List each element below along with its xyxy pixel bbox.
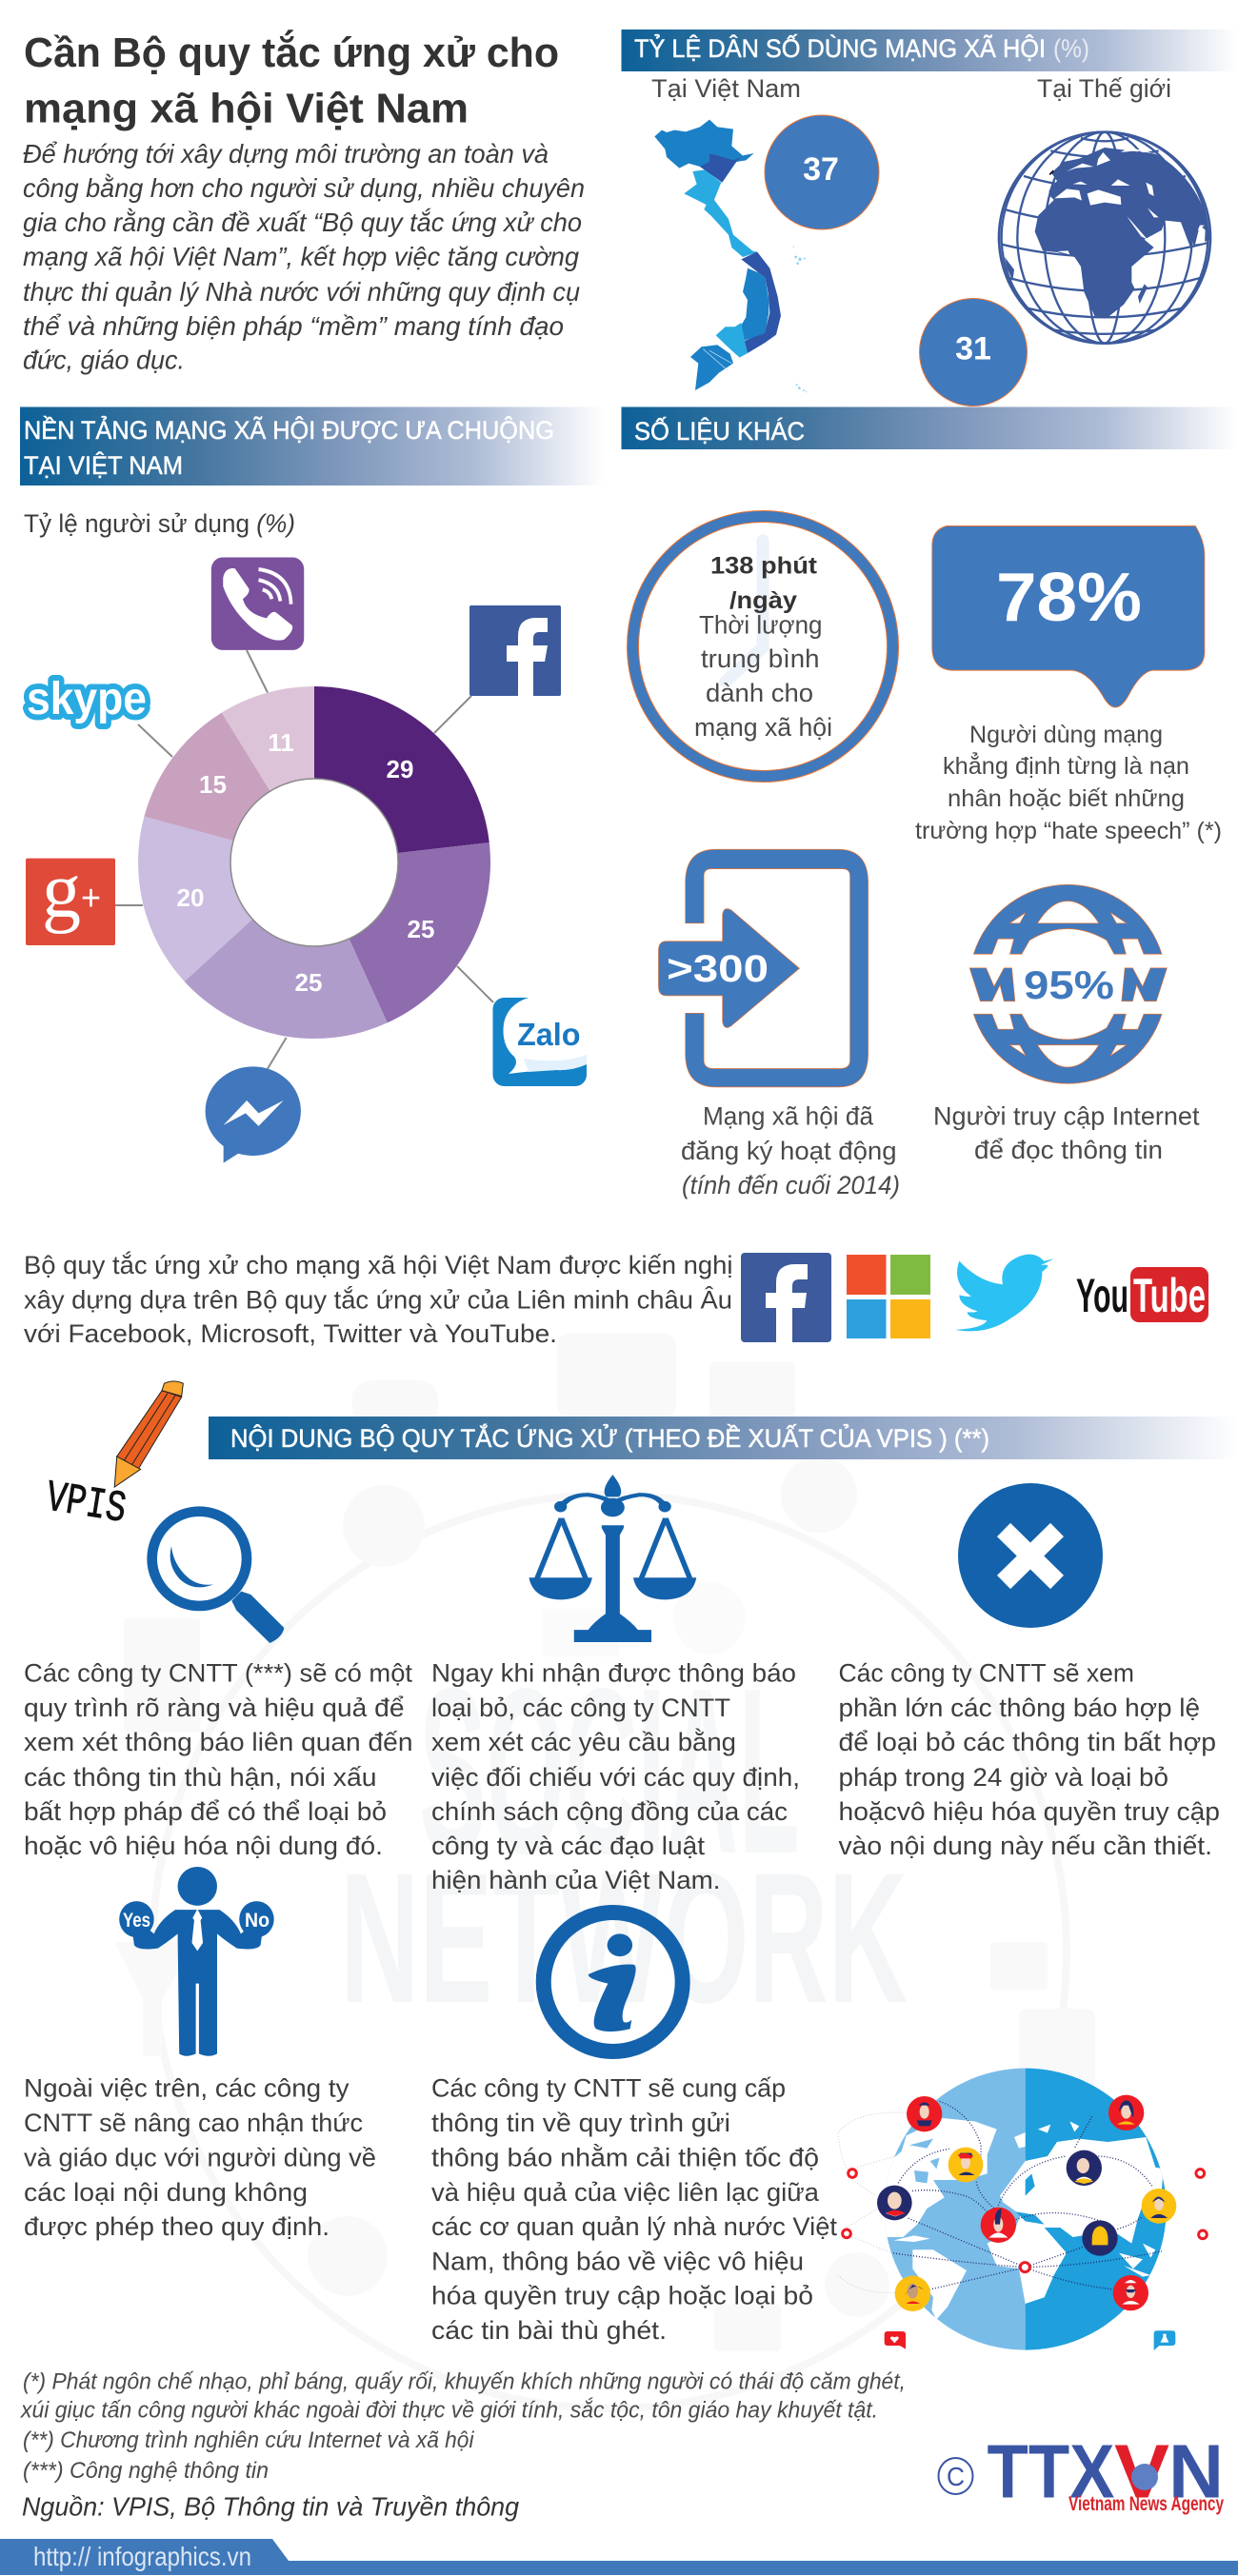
icon: scales: [529, 1475, 696, 1642]
globe icon: [999, 132, 1210, 344]
logo: TTXVN: C: [947, 2462, 965, 2491]
icon: person choosing yes or no: [119, 1867, 274, 2056]
text: column 2: việc đối chiếu với các quy định,: [431, 1763, 800, 1792]
icon: facebook: [469, 605, 561, 696]
heading: preferred platforms: NỀN TẢNG MẠNG XÃ HỘI ĐƯỢC ƯA CHUỘNG: [24, 414, 554, 445]
logo: youtube: You: [1076, 1269, 1128, 1322]
icon: magnifier: [152, 1512, 284, 1643]
icon: google plus: [26, 846, 115, 945]
donut chart: platform usage: 15: [199, 770, 227, 799]
donut chart: platform usage: 11: [268, 728, 294, 757]
donut chart: platform usage: 29: [387, 755, 413, 783]
caption: hate speech: [915, 722, 1222, 844]
logo: twitter: [955, 1255, 1054, 1331]
caption: hate speech: Người dùng mạng: [969, 722, 1163, 748]
text: code of conduct basis: với Facebook, Microsoft, Twitter và YouTube.: [24, 1319, 557, 1348]
text: column 2: loại bỏ, các công ty CNTT: [431, 1694, 730, 1722]
icon: zalo: [493, 998, 587, 1086]
icon: google plus: g: [42, 846, 81, 935]
icon: pencil with VPIS: [43, 1381, 183, 1535]
text: column 5: thông tin về quy trình gửi: [431, 2109, 730, 2137]
heading: preferred platforms: TẠI VIỆT NAM: [24, 450, 183, 480]
caption: hate speech: nhân hoặc biết những: [948, 785, 1185, 812]
footnotes: (**) Chương trình nghiên cứu Internet và xã hội: [23, 2427, 474, 2453]
text: column 3: để loại bỏ các thông tin bất hợp: [838, 1728, 1216, 1756]
text: column 5: và hiệu quả của việc liên lạc giữa: [431, 2178, 820, 2207]
footnotes: [20, 2368, 906, 2484]
text: column 2: [431, 1658, 800, 1894]
stat: time per day: mạng xã hội: [694, 713, 832, 742]
leader lines: [114, 650, 493, 1069]
stat circle: 31: [920, 299, 1027, 406]
text: column 1: [24, 1658, 413, 1860]
caption: internet readers: Người truy cập Internet: [933, 1102, 1200, 1131]
text: column 5: thông báo nhằm cải thiện tốc độ: [431, 2142, 819, 2172]
caption: registered networks: đăng ký hoạt động: [681, 1137, 897, 1165]
icon: person choosing yes or no: Yes: [123, 1910, 150, 1932]
background watermark: social network: [114, 1333, 1095, 2408]
intro text: thực thi quản lý Nhà nước với những quy định cụ: [23, 277, 580, 307]
caption: registered networks: (tính đến cuối 2014): [682, 1171, 900, 1199]
text: column 2: chính sách cộng đồng của các: [431, 1797, 788, 1826]
heading: population share: (%): [1053, 34, 1089, 63]
text: column 5: hóa quyền truy cập hoặc loại bỏ: [431, 2281, 813, 2309]
icon: viber: [211, 558, 304, 650]
donut chart: platform usage: 25: [408, 915, 434, 943]
text: column 3: pháp trong 24 giờ và loại bỏ: [838, 1763, 1168, 1792]
stat: 78 percent bubble: [932, 525, 1205, 707]
text: column 3: hoặcvô hiệu hóa quyền truy cập: [838, 1797, 1220, 1826]
heading: code contents: NỘI DUNG BỘ QUY TẮC ỨNG XỬ (THEO ĐỀ XUẤT CỦA VPIS ) (**): [230, 1422, 989, 1453]
text: column 3: Các công ty CNTT sẽ xem: [838, 1658, 1134, 1687]
text: column 4: được phép theo quy định.: [24, 2212, 329, 2241]
text: column 1: Các công ty CNTT (***) sẽ có một: [24, 1658, 412, 1687]
text: column 4: CNTT sẽ nâng cao nhận thức: [24, 2109, 363, 2137]
donut chart: platform usage: 20: [177, 883, 204, 912]
footnotes: (*) Phát ngôn chế nhạo, phỉ báng, quấy rối, khuyến khích những người có thái độ căm ghét,: [23, 2368, 906, 2395]
logo: microsoft: [847, 1255, 930, 1338]
logo: youtube: [1076, 1267, 1208, 1322]
text: column 5: Nam, thông báo về việc vô hiệu: [431, 2247, 804, 2275]
text: code of conduct basis: Bộ quy tắc ứng xử cho mạng xã hội Việt Nam được kiến nghị: [24, 1250, 733, 1279]
text: column 2: công ty và các đạo luật: [431, 1832, 706, 1860]
caption: registered networks: [681, 1102, 900, 1199]
stat: time per day: dành cho: [706, 679, 813, 707]
footer bar with URL: http:// infographics.vn: [33, 2542, 251, 2571]
text: column 4: Ngoài việc trên, các công ty: [24, 2073, 349, 2102]
intro text: gia cho rằng cần đề xuất “Bộ quy tắc ứng xử cho: [23, 208, 582, 237]
heading: other figures: [621, 407, 1238, 449]
text: column 2: xem xét các yêu cầu bằng: [431, 1727, 736, 1756]
icon: zalo: Zalo: [517, 1017, 581, 1052]
logo: facebook: [741, 1253, 831, 1342]
logo: TTXVN: V: [1114, 2429, 1169, 2513]
footer bar with URL: [0, 2539, 1238, 2575]
illustration: connected world: [838, 2066, 1207, 2351]
icon: remove cross: [958, 1483, 1103, 1628]
stat: time per day: 138 phút: [710, 552, 818, 579]
stat: more than 300 networks: >300: [667, 948, 769, 990]
text: column 4: các loại nội dung không: [24, 2178, 308, 2207]
donut chart: platform usage: [138, 686, 490, 1039]
heading: preferred platforms: [20, 407, 604, 485]
text: column 5: các tin bài thù ghét.: [431, 2316, 667, 2345]
icon: information: [544, 1912, 683, 2051]
stat: more than 300 networks: [658, 849, 869, 1087]
stat circle: 37: 37: [803, 151, 839, 188]
label: in Vietnam: Tại Việt Nam: [651, 74, 801, 103]
intro text: công bằng hơn cho người sử dụng, nhiều chuyên: [23, 173, 585, 203]
icon: google plus: +: [81, 879, 101, 919]
text: column 4: [24, 2073, 376, 2241]
stat: time per day: Thời lượng: [699, 611, 823, 640]
donut chart: platform usage: 25: [295, 968, 322, 997]
title: mạng xã hội Việt Nam: [24, 86, 469, 131]
text: column 2: Ngay khi nhận được thông báo: [431, 1658, 796, 1687]
caption: hate speech: trường hợp “hate speech” (*): [915, 818, 1222, 844]
text: column 1: bất hợp pháp để có thể loại bỏ: [24, 1797, 387, 1826]
heading: population share: TỶ LỆ DÂN SỐ DÙNG MẠNG XÃ HỘI: [634, 32, 1046, 63]
stat: time per day: trung bình: [701, 644, 819, 673]
caption: internet readers: [933, 1102, 1200, 1164]
stat: time per day: /ngày: [729, 587, 797, 614]
intro text: mạng xã hội Việt Nam”, kết hợp việc tăng cường: [23, 242, 579, 271]
footnotes: xúi giục tấn công người khác ngoài đời thực về giới tính, sắc tộc, tôn giáo hay khuyết tật.: [20, 2397, 878, 2424]
text: column 4: và giáo dục với người dùng về: [24, 2144, 376, 2172]
caption: registered networks: Mạng xã hội đã: [703, 1102, 874, 1131]
intro text: đức, giáo dục.: [23, 345, 185, 375]
text: column 5: Các công ty CNTT sẽ cung cấp: [431, 2073, 786, 2102]
text: column 2: hiện hành của Việt Nam.: [431, 1866, 720, 1894]
logo: TTXVN: N: [1168, 2429, 1224, 2513]
text: column 1: các thông tin thù hận, nói xấu: [24, 1763, 376, 1792]
title: Cần Bộ quy tắc ứng xử cho: [24, 29, 559, 76]
intro text: [23, 139, 585, 375]
text: column 3: vào nội dung này nếu cần thiết.: [838, 1832, 1212, 1860]
map of Vietnam: [654, 120, 807, 392]
logo: TTXVN: [939, 2429, 1224, 2515]
stat: 95 percent globe: 95%: [1024, 962, 1114, 1007]
intro text: thể và những biện pháp “mềm” mang tính đạo: [23, 311, 564, 341]
logo: TTXVN: TTX: [987, 2429, 1114, 2513]
icon: messenger: [206, 1066, 301, 1163]
text: column 3: phần lớn các thông báo hợp lệ: [838, 1694, 1200, 1722]
heading: code contents: [209, 1417, 1238, 1459]
label: in the world: Tại Thế giới: [1037, 74, 1171, 103]
icon: skype: skype: [27, 674, 147, 724]
source line: Nguồn: VPIS, Bộ Thông tin và Truyền thông: [22, 2492, 519, 2521]
caption: hate speech: khẳng định từng là nạn: [943, 751, 1189, 780]
text: code of conduct basis: xây dựng dựa trên Bộ quy tắc ứng xử của Liên minh châu Âu: [24, 1285, 732, 1314]
title: [24, 29, 559, 131]
stat circle: 31: 31: [955, 331, 991, 367]
stat: 78 percent bubble: 78%: [996, 560, 1142, 636]
stat circle: 37: [765, 115, 879, 229]
intro text: Để hướng tới xây dựng môi trường an toàn và: [23, 139, 549, 168]
text: column 1: quy trình rõ ràng và hiệu quả để: [24, 1694, 404, 1722]
icon: person choosing yes or no: No: [245, 1910, 270, 1932]
footnotes: (***) Công nghệ thông tin: [23, 2458, 269, 2484]
stat: time per day: [627, 510, 899, 783]
caption: internet readers: để đọc thông tin: [974, 1136, 1163, 1164]
text: column 5: [431, 2073, 837, 2345]
text: column 1: hoặc vô hiệu hóa nội dung đó.: [24, 1832, 383, 1860]
text: column 3: [838, 1658, 1220, 1860]
text: column 5: các cơ quan quản lý nhà nước Việt: [431, 2212, 837, 2241]
heading: other figures: SỐ LIỆU KHÁC: [634, 415, 805, 446]
text: code of conduct basis: [24, 1250, 733, 1348]
icon: pencil with VPIS: VPIS: [43, 1473, 130, 1535]
chart subtitle: Tỷ lệ người sử dụng (%): [24, 509, 295, 538]
heading: population share: [621, 30, 1238, 71]
stat: 95 percent globe: [969, 884, 1167, 1083]
text: column 1: xem xét thông báo liên quan đến: [24, 1728, 413, 1756]
